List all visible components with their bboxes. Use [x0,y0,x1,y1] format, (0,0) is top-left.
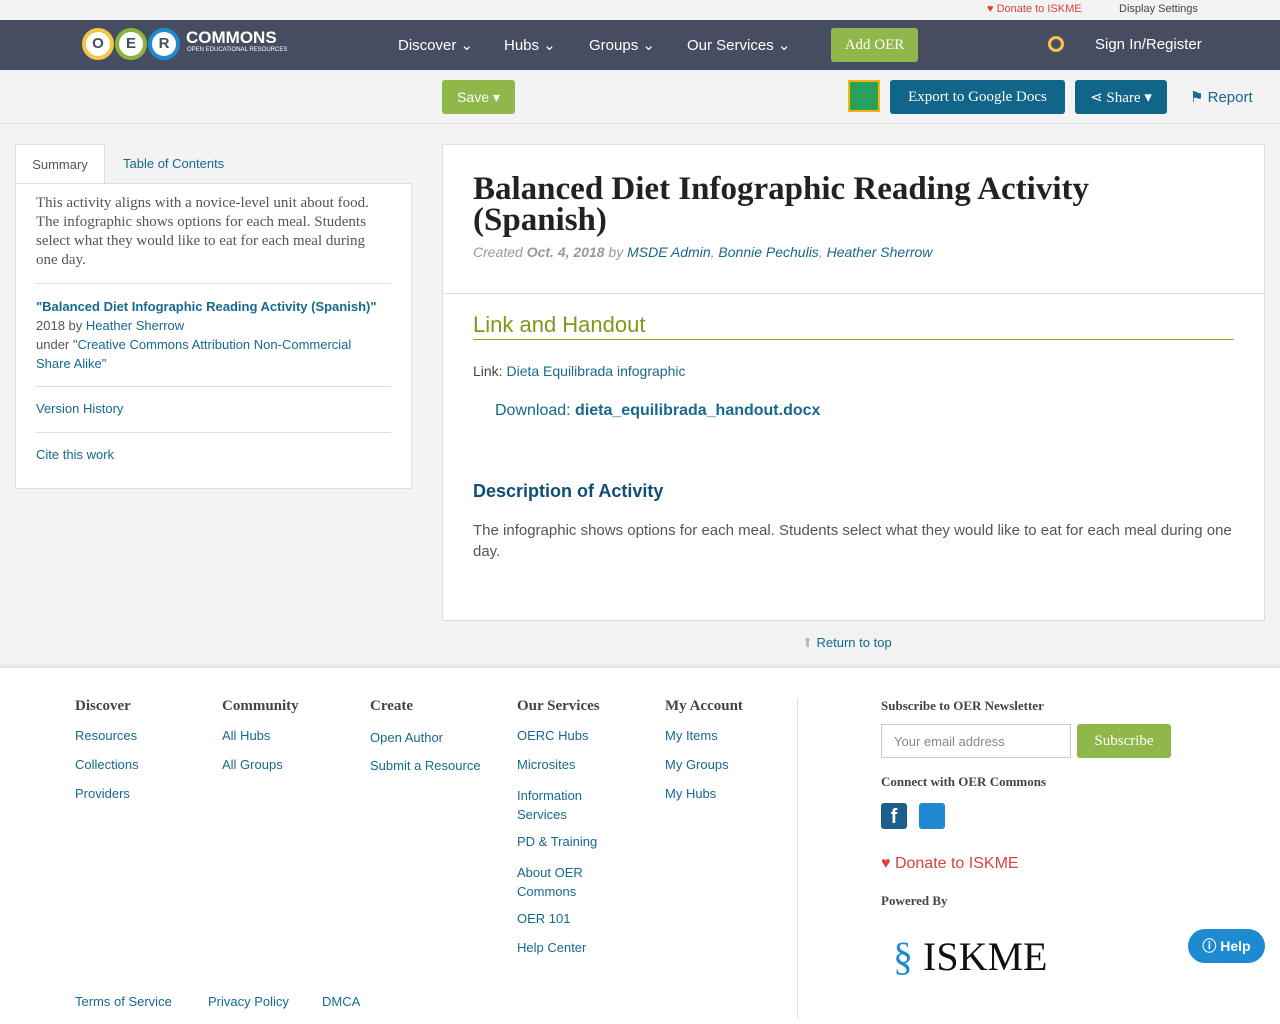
footer: f [891,806,897,828]
nav bar: Hubs ⌄ [504,37,556,54]
footer: My Account [665,698,743,714]
footer: Privacy Policy [208,994,289,1009]
footer: Connect with OER Commons [881,774,1046,789]
sidebar panel [15,144,412,489]
footer: Commons [517,884,576,899]
main panel: Created Oct. 4, 2018 by MSDE Admin, Bonnie Pechulis, Heather Sherrow [473,244,932,260]
footer: Resources [75,728,137,743]
nav bar: Sign In/Register [1095,36,1202,53]
footer: My Items [665,728,718,743]
sidebar panel: under "Creative Commons Attribution Non-Commercial Share Alike" [36,337,351,371]
sidebar panel: 2018 by Heather Sherrow [36,318,184,333]
sidebar panel: Table of Contents [123,156,224,171]
logo: O [92,35,104,52]
footer: Open Author [370,730,443,745]
footer: Discover [75,698,131,714]
sidebar panel: Cite this work [36,447,114,462]
footer: OERC Hubs [517,728,589,743]
footer: Providers [75,786,130,801]
footer: Create [370,698,413,714]
text: ⚑ Report [1190,89,1253,106]
footer: My Hubs [665,786,716,801]
search icon [1048,36,1064,52]
footer: ♥ Donate to ISKME [881,855,1019,872]
footer: Terms of Service [75,994,172,1009]
sidebar panel: Version History [36,401,123,416]
logo [82,28,288,60]
footer [0,668,1280,1024]
main panel: The infographic shows options for each meal. Students select what they would like to eat for each meal during one day. [473,522,1232,560]
footer: § ISKME [893,934,1047,979]
text: Save ▾ [457,88,500,104]
section heading [473,312,1234,340]
logo: E [126,35,136,52]
sidebar panel: "Balanced Diet Infographic Reading Activity (Spanish)" [36,299,377,314]
add oer: Add OER [845,36,904,52]
footer: Subscribe to OER Newsletter [881,698,1044,713]
footer: Subscribe [1094,732,1154,748]
footer: Help Center [517,940,586,955]
return to top: ⬆ Return to top [802,635,892,650]
footer: All Hubs [222,728,270,743]
footer: Your email address [894,734,1005,749]
footer: Our Services [517,698,600,714]
footer: Information [517,788,582,803]
top bar [987,3,1198,15]
top bar: ♥ Donate to ISKME [987,3,1082,15]
logo: OPEN EDUCATIONAL RESOURCES [187,47,287,53]
toolbar [0,123,1280,124]
main panel [442,144,1265,621]
footer: Services [517,807,567,822]
nav bar: Our Services ⌄ [687,37,790,54]
text: Export to Google Docs [908,88,1047,104]
footer: ⓘ Help [1202,938,1251,954]
footer: Collections [75,757,139,772]
nav bar: Discover ⌄ [398,37,473,54]
footer: Community [222,698,299,714]
footer: OER 101 [517,911,570,926]
main panel: Link: Dieta Equilibrada infographic [473,363,685,379]
footer: Powered By [881,893,948,908]
add oer [831,28,918,62]
footer: Microsites [517,757,576,772]
nav bar [0,20,1280,70]
logo: COMMONS [186,28,277,47]
main panel: Description of Activity [473,481,663,501]
footer: Submit a Resource [370,758,481,773]
sidebar panel: Summary [32,157,88,172]
footer: My Groups [665,757,729,772]
section heading: Link and Handout [473,312,645,337]
sidebar panel: This activity aligns with a novice-level unit about food. The infographic shows options for each meal. Students select what they would like to eat for each meal during one day. [36,195,369,268]
text: ⋖ Share ▾ [1090,90,1152,106]
main panel: Download: dieta_equilibrada_handout.docx [495,402,820,419]
title: Balanced Diet Infographic Reading Activity (Spanish) [473,171,1089,238]
footer: DMCA [322,994,360,1009]
logo: R [159,35,169,52]
nav bar: Groups ⌄ [589,37,655,54]
footer: All Groups [222,757,283,772]
footer: PD & Training [517,834,597,849]
footer: About OER [517,865,583,880]
top bar: Display Settings [1119,3,1198,15]
